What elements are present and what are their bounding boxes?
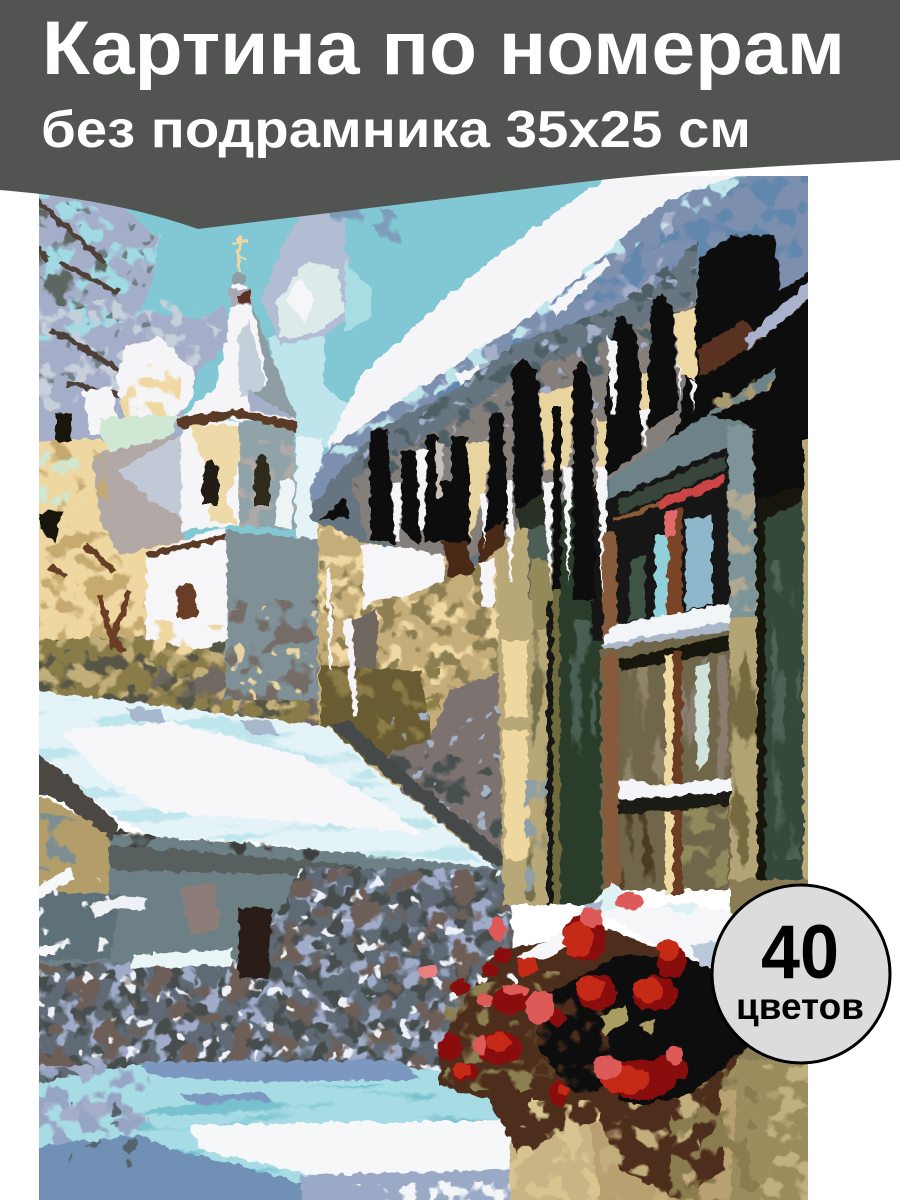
upper left tree branches: [39, 194, 228, 452]
door: [239, 908, 272, 978]
background golden trees: [39, 412, 320, 726]
lower right wall and foliage: [440, 880, 820, 1200]
window: overhang and frame: [600, 368, 777, 895]
right green boards: [754, 439, 808, 880]
badge: 40 colours: цветов: [736, 986, 864, 1027]
church tower: [140, 272, 332, 700]
lower house wall: [30, 750, 505, 980]
church cross: [232, 235, 248, 271]
red flowers: [418, 892, 688, 1105]
upper snow roof: [310, 170, 820, 505]
snow covered lower roof: [30, 690, 495, 868]
header banner: [0, 0, 900, 229]
sky: [125, 176, 764, 649]
gold plank wall: [495, 470, 604, 905]
clouds: [262, 205, 405, 450]
badge: 40 colours: [712, 885, 890, 1063]
dark eave zone with timber: [310, 235, 820, 600]
snow on flower box: [517, 883, 735, 970]
icicles: [326, 309, 697, 717]
snowy bushes: [30, 868, 515, 1085]
fallen petal: [418, 965, 438, 979]
title: Картина по номерам: [42, 6, 845, 91]
snowy ground: [30, 1060, 530, 1200]
badge: 40 colours: 40: [761, 910, 839, 995]
bushes behind lower roof: [318, 520, 515, 880]
painting: winter church and snowy eaves: [20, 160, 820, 1200]
subtitle: без подрамника 35х25 см: [41, 101, 751, 159]
